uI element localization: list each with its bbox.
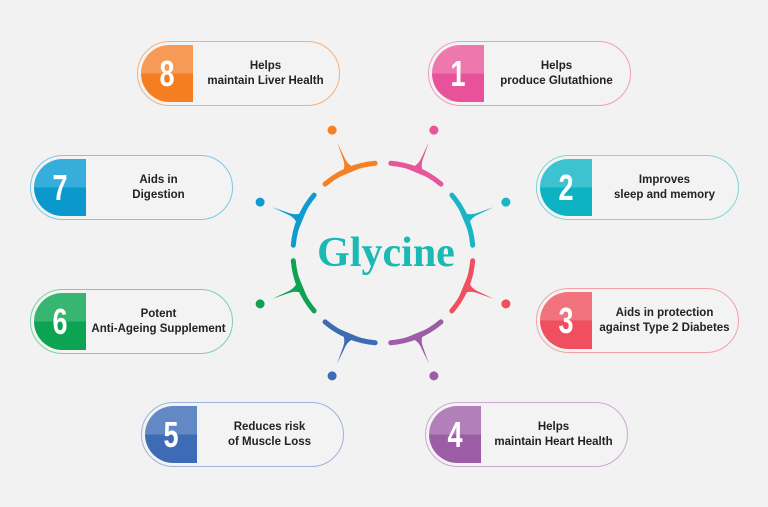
card 4: maintain Heart Health (494, 436, 613, 448)
card 2 (536, 155, 739, 220)
card 7: 7 (52, 167, 68, 208)
card 2: 2 (558, 167, 574, 208)
card 2: Improves (639, 174, 690, 186)
card 7: Digestion (132, 188, 185, 200)
card 1: 1 (450, 53, 466, 94)
title: Glycine: Glycine (317, 230, 455, 276)
card 3: 3 (558, 300, 574, 341)
card 8 (137, 41, 340, 106)
card 7: Aids in (139, 174, 178, 186)
card 1: produce Glutathione (500, 74, 613, 86)
card 4: 4 (447, 414, 463, 455)
card 7 (30, 155, 233, 220)
card 6: 6 (52, 301, 68, 342)
card 3: Aids in protection (616, 306, 713, 318)
card 8: Helps (250, 60, 281, 72)
card 5: 5 (163, 414, 179, 455)
card 6 (30, 289, 233, 354)
card 1 (428, 41, 631, 106)
card 3 (536, 288, 739, 353)
card 6: Potent (141, 308, 176, 320)
card 5: of Muscle Loss (228, 436, 311, 448)
card 1: Helps (541, 60, 572, 72)
card 6: Anti-Ageing Supplement (91, 322, 226, 334)
card 8: 8 (159, 53, 175, 94)
card 3: against Type 2 Diabetes (599, 322, 730, 334)
card 5 (141, 402, 344, 467)
card 4 (425, 402, 628, 467)
card 5: Reduces risk (234, 420, 305, 432)
card 2: sleep and memory (614, 188, 715, 200)
card 8: maintain Liver Health (207, 74, 324, 86)
card 4: Helps (538, 420, 569, 432)
